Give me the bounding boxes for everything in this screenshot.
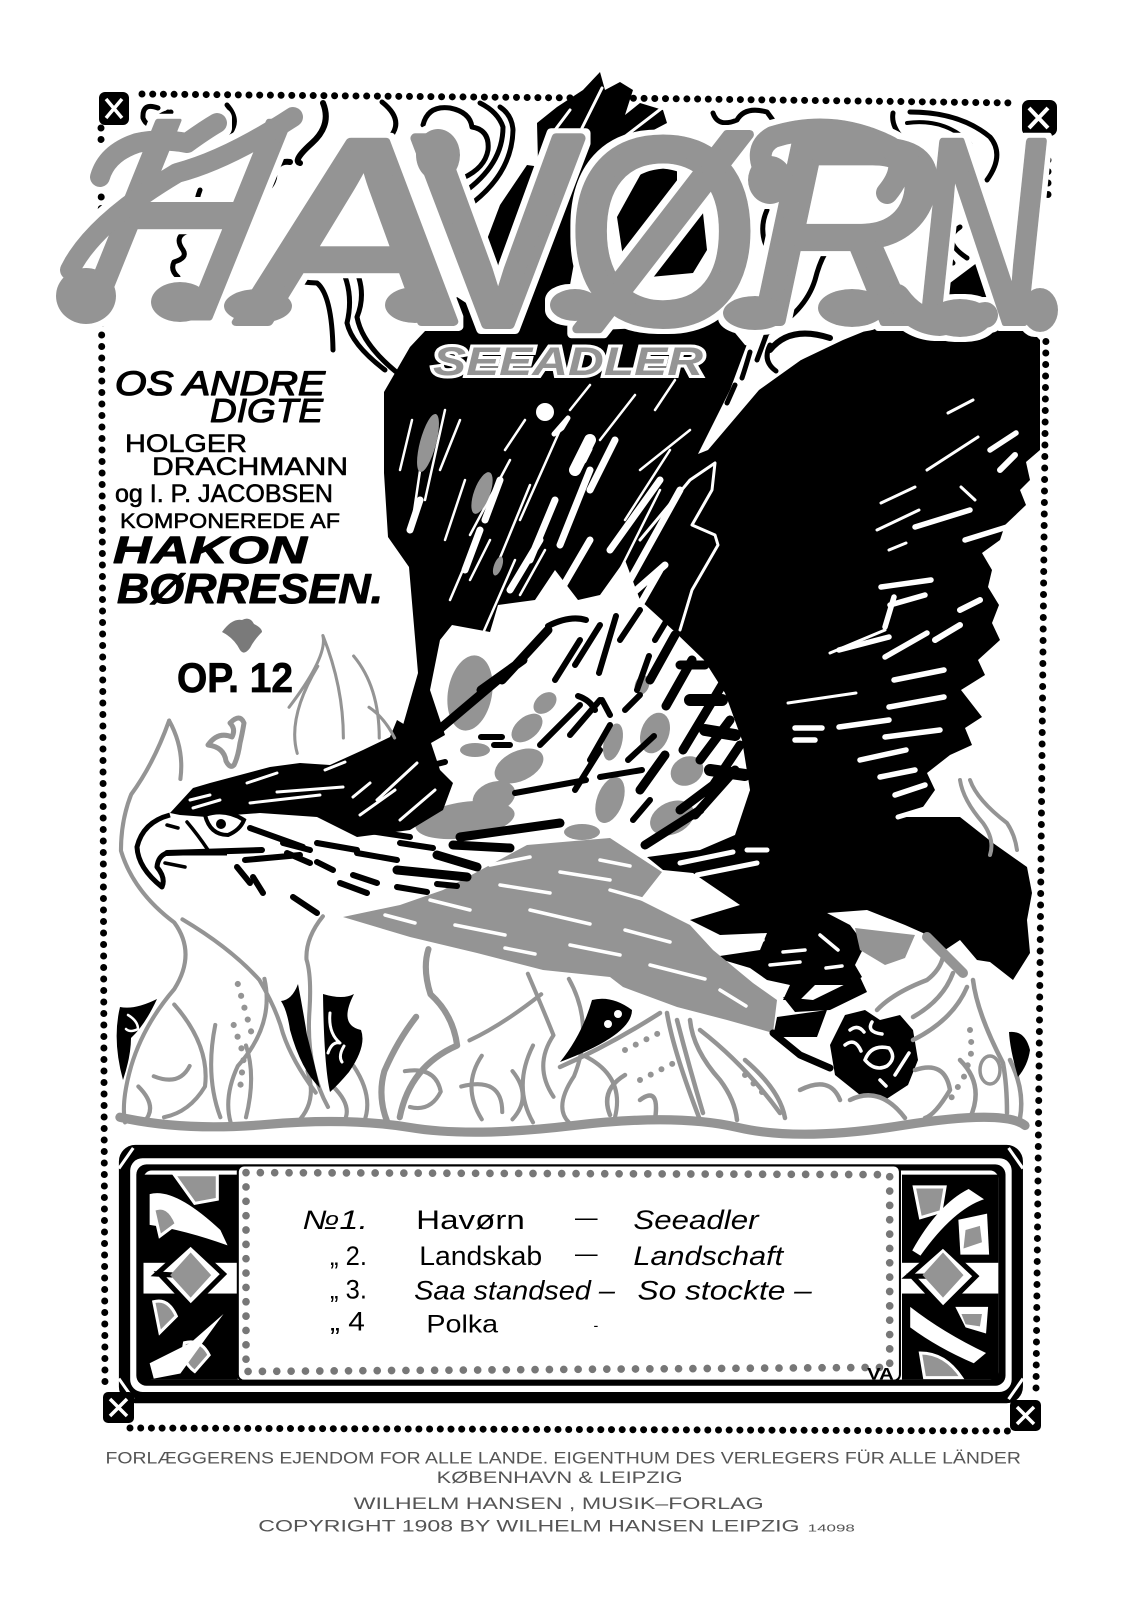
- title: HAVØRN: R: [724, 86, 974, 378]
- text block: credits: HAKON: [113, 530, 309, 572]
- text block: song list: Landschaft: [633, 1241, 785, 1271]
- eagle: white streaks on big wing: [680, 400, 1016, 875]
- text block: publisher imprint: FORLÆGGERENS EJENDOM FOR ALLE LANDE. EIGENTHUM DES VERLEGERS FÜR ALLE LÄNDER: [106, 1450, 1021, 1468]
- text block: song list: —: [575, 1241, 598, 1266]
- title flourishes and foot blobs: [56, 117, 1058, 337]
- title: HAVØRN: Ø: [568, 85, 758, 378]
- text block: credits: DRACHMANN: [152, 453, 348, 481]
- text block: song list: №1.: [302, 1205, 368, 1235]
- text block: song list: „ 3.: [330, 1275, 367, 1305]
- corner ornament: top left: [99, 92, 171, 136]
- title: HAVØRN: [33, 60, 1065, 382]
- text block: song list: „ 2.: [330, 1241, 367, 1271]
- title: HAVØRN: H: [33, 60, 334, 380]
- title: HAVØRN: A: [229, 85, 485, 378]
- white centre panel with dotted edge: [238, 1165, 900, 1384]
- text block: song list: „ 4: [330, 1306, 365, 1336]
- title: black squiggles: [173, 102, 997, 375]
- black fingers below the tail: [690, 913, 865, 1000]
- text block: song list: Seeadler: [633, 1205, 760, 1235]
- corner ornament: bottom right: [1010, 1400, 1041, 1431]
- inner black of letter O: [617, 162, 707, 277]
- text block: song list: Polka: [426, 1311, 499, 1338]
- text block: credits: BØRRESEN.: [117, 565, 383, 612]
- eagle: grey body feathers: [343, 838, 963, 1033]
- eagle: white feather streaks on back wing: [400, 380, 718, 640]
- eagle: leg and talon: [773, 977, 918, 1100]
- lower back: white feather zone: [345, 560, 750, 900]
- panel: song list frame: [119, 1145, 1023, 1403]
- eagle eye: [205, 812, 244, 835]
- dotted page border: [101, 94, 1048, 1431]
- subtitle: SEEADLER: SEEADLER: [433, 340, 703, 384]
- text block: publisher imprint: WILHELM HANSEN , MUSIK–FORLAG: [354, 1495, 764, 1513]
- text block: publisher imprint: KØBENHAVN & LEIPZIG: [437, 1469, 683, 1487]
- text block: song list: Landskab: [419, 1241, 542, 1271]
- eagle: black fingers on back wing: [380, 610, 745, 845]
- cuts through crest feathers: [555, 88, 662, 148]
- text block: publisher imprint: [106, 1450, 1021, 1535]
- eagle: head and neck: [137, 720, 560, 913]
- right side panel: [902, 1175, 998, 1380]
- text block: credits: [113, 365, 383, 612]
- title: HAVØRN: N: [902, 85, 1065, 378]
- eagle: black wings, back and tail: [345, 72, 1040, 1000]
- text block: credits: og I. P. JACOBSEN: [115, 480, 333, 508]
- black inside the V: [483, 165, 548, 280]
- title: HAVØRN: V: [414, 81, 583, 382]
- icon: small ornament above opus number: [222, 619, 262, 653]
- text block: song list: —: [575, 1205, 598, 1230]
- icon: small grey flame ornament: [208, 718, 244, 766]
- text block: credits: OS ANDRE: [115, 365, 325, 403]
- text block: credits: KOMPONEREDE AF: [120, 510, 340, 533]
- eagle beak: [137, 815, 262, 887]
- white centre panel with dotted edge: VA: [867, 1366, 894, 1384]
- text block: song list: [302, 1205, 812, 1338]
- text block: credits: HOLGER: [125, 430, 247, 458]
- flames around the eagle: [120, 636, 1025, 1134]
- text block: credits: DIGTE: [210, 392, 324, 429]
- corner ornament: bottom left: [103, 1392, 134, 1423]
- text block: song list: -: [593, 1318, 598, 1334]
- text block: publisher imprint: COPYRIGHT 1908 BY WILHELM HANSEN LEIPZIG: [258, 1517, 799, 1535]
- text block: song list: Havørn: [416, 1205, 525, 1235]
- flames on the right: [560, 780, 1021, 1120]
- text block: song list: Saa standsed –: [414, 1276, 615, 1306]
- opus number: OP. 12: [177, 654, 293, 701]
- text block: publisher imprint: 14098: [808, 1523, 855, 1534]
- neck streaks: [237, 828, 457, 913]
- text block: song list: So stockte –: [638, 1276, 812, 1306]
- corner ornament: top right: [1022, 100, 1057, 136]
- left side panel: [144, 1175, 238, 1380]
- floral ornaments in the flames: [117, 984, 1030, 1092]
- white gap between back wing and big wing: [698, 336, 843, 454]
- eagle: grey patches on back wing: [413, 412, 709, 845]
